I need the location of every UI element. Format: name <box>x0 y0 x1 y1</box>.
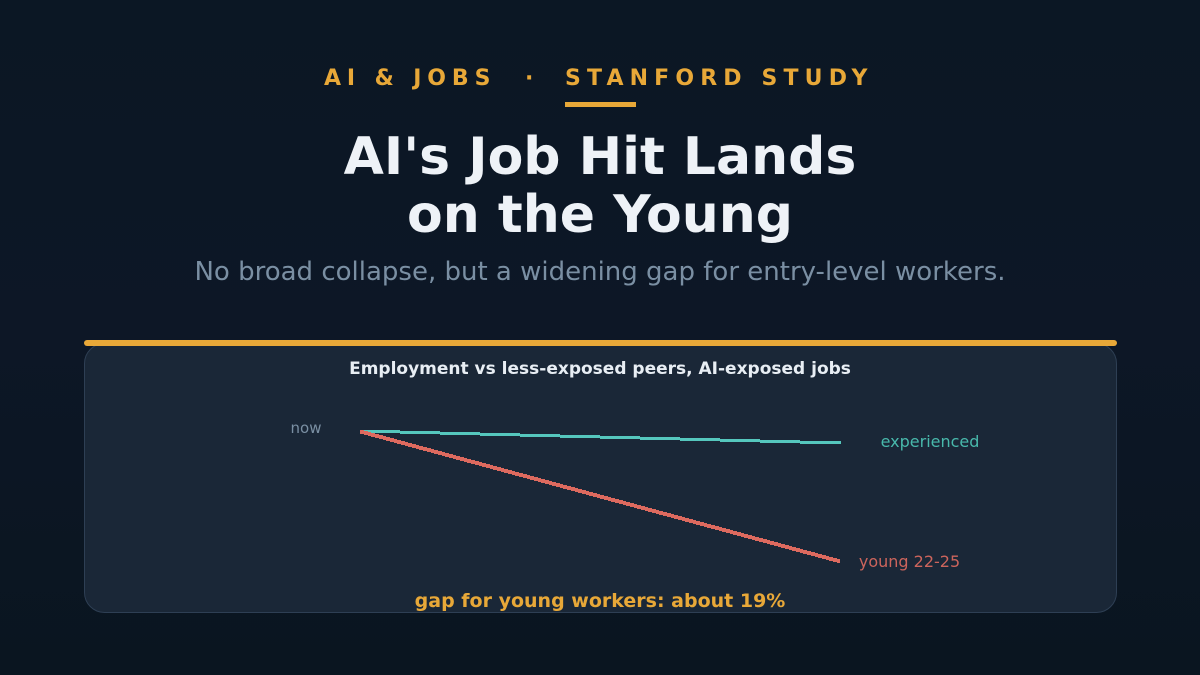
eyebrow label: · <box>525 66 533 91</box>
line: young workers <box>360 430 840 564</box>
eyebrow label: STANFORD STUDY <box>565 66 874 91</box>
label: experienced: experienced <box>881 432 979 451</box>
title <box>344 127 856 245</box>
line chart <box>291 419 979 571</box>
line: experienced workers <box>360 430 841 444</box>
subtitle: No broad collapse, but a widening gap for entry-level workers. <box>194 257 1006 287</box>
panel accent bar <box>84 340 1117 346</box>
title: on the Young <box>407 185 793 245</box>
panel: chart card <box>84 340 1117 612</box>
chart heading: Employment vs less-exposed peers, AI-exposed jobs <box>349 359 851 379</box>
label: young 22-25: young 22-25 <box>859 552 960 571</box>
eyebrow label: AI & JOBS <box>324 66 496 91</box>
accent underline <box>565 102 636 107</box>
start label: now <box>291 419 321 437</box>
gap callout: gap for young workers: about 19% <box>415 590 785 612</box>
title: AI's Job Hit Lands <box>344 127 856 187</box>
